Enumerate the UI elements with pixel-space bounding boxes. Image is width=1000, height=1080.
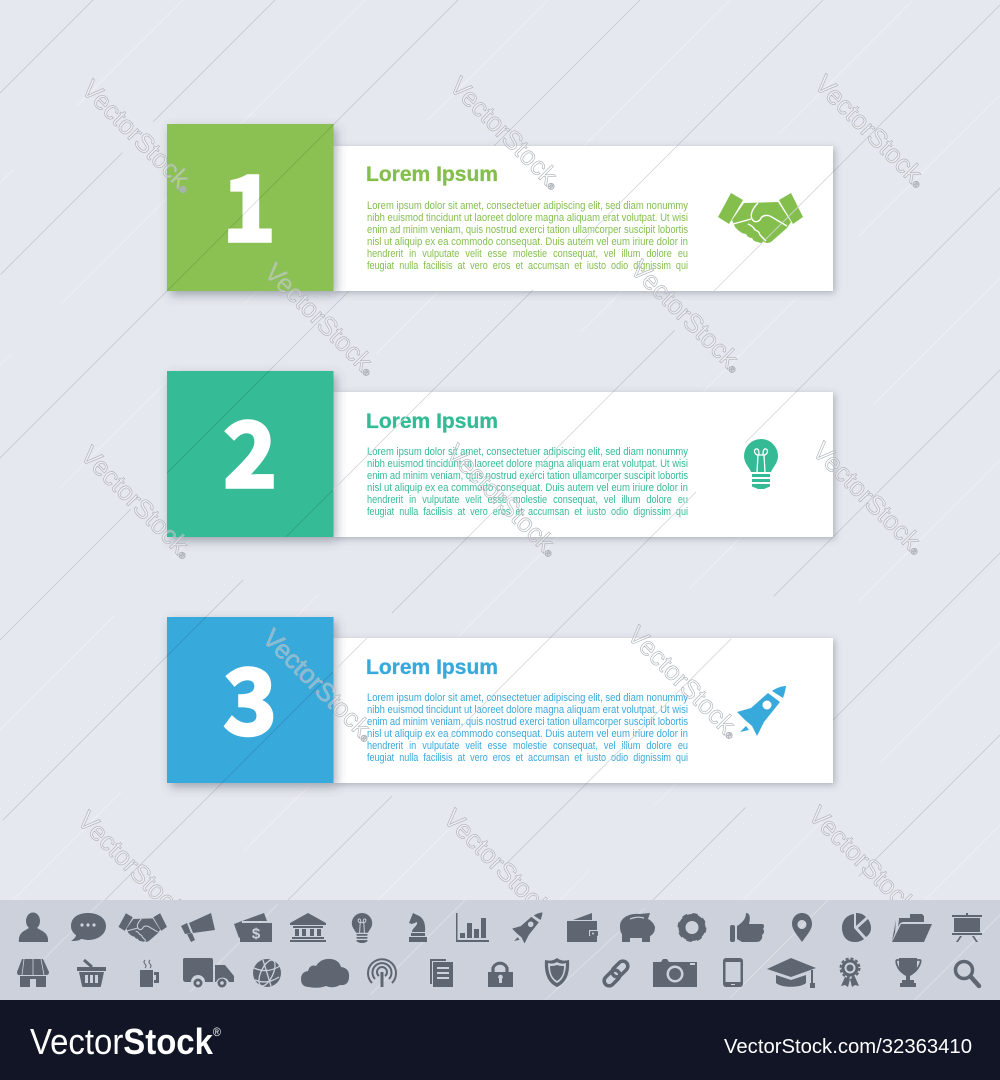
watermarks: VectorStock® xyxy=(72,805,196,929)
watermarks: VectorStock® xyxy=(803,800,927,924)
footer logo: VectorStock xyxy=(30,1021,221,1062)
icon: basket xyxy=(77,960,106,987)
number block: step 2 xyxy=(167,371,334,537)
text block: step 2: hendrerit in vulputate velit esse molestie consequat, vel illum dolore eu xyxy=(367,494,688,506)
block diagonal lines xyxy=(167,124,334,783)
icon: thumbs up xyxy=(730,913,764,942)
number block: step 1 xyxy=(167,124,334,291)
watermarks xyxy=(72,69,933,929)
text block: step 3: Lorem ipsum dolor sit amet, consectetuer adipiscing elit, sed diam nonummy xyxy=(367,692,689,704)
watermarks: VectorStock® xyxy=(438,803,562,927)
number 2: 2 xyxy=(223,383,277,513)
watermarks: VectorStock® xyxy=(259,257,383,381)
watermarks: VectorStock® xyxy=(809,69,933,193)
icon: piggy bank xyxy=(620,913,655,942)
card: step 1 background xyxy=(333,146,833,291)
icon: chain link xyxy=(602,959,630,988)
icon: handshake xyxy=(718,193,803,243)
icon: documents xyxy=(430,959,453,987)
icon: megaphone xyxy=(181,913,215,942)
icon: user xyxy=(19,912,48,942)
heading: step 1: Lorem Ipsum xyxy=(366,162,498,186)
footer logo: ® xyxy=(213,1025,221,1039)
watermarks: VectorStock® xyxy=(257,623,381,747)
text block: step 3: enim ad minim veniam, quis nostrud exerci tation ullamcorper suscipit lobortis xyxy=(367,716,688,728)
panel: step 3 xyxy=(167,617,833,783)
icon: padlock xyxy=(488,963,513,987)
text block: step 3: nibh euismod tincidunt ut laoreet dolore magna aliquam erat volutpat. Ut wisi xyxy=(367,704,688,716)
watermarks: VectorStock® xyxy=(441,438,565,562)
panel: step 2 xyxy=(167,371,833,537)
text block: step 3: nisl ut aliquip ex ea commodo consequat. Duis autem vel eum iriure dolor in xyxy=(367,728,688,740)
text block: step 3: feugiat nulla facilisis at vero eros et accumsan et iusto odio dignissim qui xyxy=(367,752,688,764)
panel: icon strip xyxy=(0,900,1000,1000)
icon: broadcast signal xyxy=(368,959,396,987)
icon: presentation board xyxy=(952,913,982,942)
icon: graduation cap xyxy=(767,958,816,988)
watermarks: VectorStock® xyxy=(76,74,200,198)
icon: gear xyxy=(679,914,705,940)
icon: bank xyxy=(290,913,326,942)
icon: trophy xyxy=(896,958,921,987)
watermarks: VectorStock® xyxy=(622,620,746,744)
watermarks: VectorStock® xyxy=(807,436,931,560)
text block: step 1: feugiat nulla facilisis at vero eros et accumsan et iusto odio dignissim qui xyxy=(367,260,688,272)
text block: step 2: nisl ut aliquip ex ea commodo consequat. Duis autem vel eum iriure dolor in xyxy=(367,482,688,494)
text block: step 1: nibh euismod tincidunt ut laoreet dolore magna aliquam erat volutpat. Ut wisi xyxy=(367,212,688,224)
card: step 3 background xyxy=(333,638,833,783)
icon: coffee mug xyxy=(140,960,159,987)
text block: step 2: Lorem ipsum dolor sit amet, consectetuer adipiscing elit, sed diam nonummy xyxy=(367,446,689,458)
heading: step 2: Lorem Ipsum xyxy=(366,409,498,433)
icon: money xyxy=(234,913,272,942)
number 1: 1 xyxy=(222,137,276,267)
watermarks: VectorStock® xyxy=(75,440,199,564)
text block: step 1: hendrerit in vulputate velit esse molestie consequat, vel illum dolore eu xyxy=(367,248,688,260)
icon: map pin xyxy=(792,913,812,942)
icon: pie chart xyxy=(842,913,871,942)
icon: light bulb small xyxy=(352,913,372,943)
icon: handshake small xyxy=(118,913,167,942)
icon: shop xyxy=(17,959,49,987)
icon: award badge xyxy=(840,958,860,987)
text block: step 1: enim ad minim veniam, quis nostrud exerci tation ullamcorper suscipit lobortis xyxy=(367,224,688,236)
text block: step 3 xyxy=(367,692,689,764)
icon: shield xyxy=(545,958,569,987)
text block: step 2 xyxy=(367,446,689,518)
text block: step 2: feugiat nulla facilisis at vero eros et accumsan et iusto odio dignissim qui xyxy=(367,506,688,518)
footer bar xyxy=(0,1000,1000,1080)
icon: light bulb xyxy=(744,439,778,489)
icon: bar chart xyxy=(456,913,489,942)
text block: step 1: Lorem ipsum dolor sit amet, consectetuer adipiscing elit, sed diam nonummy xyxy=(367,200,689,212)
icon: cloud xyxy=(301,959,349,988)
text block: step 2: enim ad minim veniam, quis nostrud exerci tation ullamcorper suscipit lobortis xyxy=(367,470,688,482)
icon: smartphone xyxy=(723,958,743,987)
icon: rocket xyxy=(737,686,786,736)
footer image id: VectorStock.com/32363410 xyxy=(724,1036,972,1058)
icon: rocket small xyxy=(512,912,542,944)
number 3: 3 xyxy=(223,630,277,760)
heading: step 3: Lorem Ipsum xyxy=(366,655,498,679)
card: step 2 background xyxy=(333,392,833,537)
icon: globe xyxy=(253,958,281,988)
text block: step 1: nisl ut aliquip ex ea commodo consequat. Duis autem vel eum iriure dolor in xyxy=(367,236,688,248)
watermarks: VectorStock® xyxy=(625,254,749,378)
number block: step 3 xyxy=(167,617,334,783)
text block: step 1 xyxy=(367,200,689,272)
icon: delivery truck xyxy=(183,958,234,988)
icon: magnifier xyxy=(956,962,979,986)
icon: camera xyxy=(653,959,697,987)
watermarks: VectorStock® xyxy=(444,71,568,195)
text block: step 3: hendrerit in vulputate velit esse molestie consequat, vel illum dolore eu xyxy=(367,740,688,752)
icon: wallet xyxy=(567,913,598,942)
icon: chess knight xyxy=(409,913,427,942)
icon: folder xyxy=(892,914,932,942)
panel: step 1 xyxy=(167,124,833,291)
text block: step 2: nibh euismod tincidunt ut laoreet dolore magna aliquam erat volutpat. Ut wisi xyxy=(367,458,688,470)
icon: money: $ xyxy=(252,926,261,942)
icon: chat bubble xyxy=(71,913,106,941)
card diagonal lines xyxy=(333,146,833,783)
